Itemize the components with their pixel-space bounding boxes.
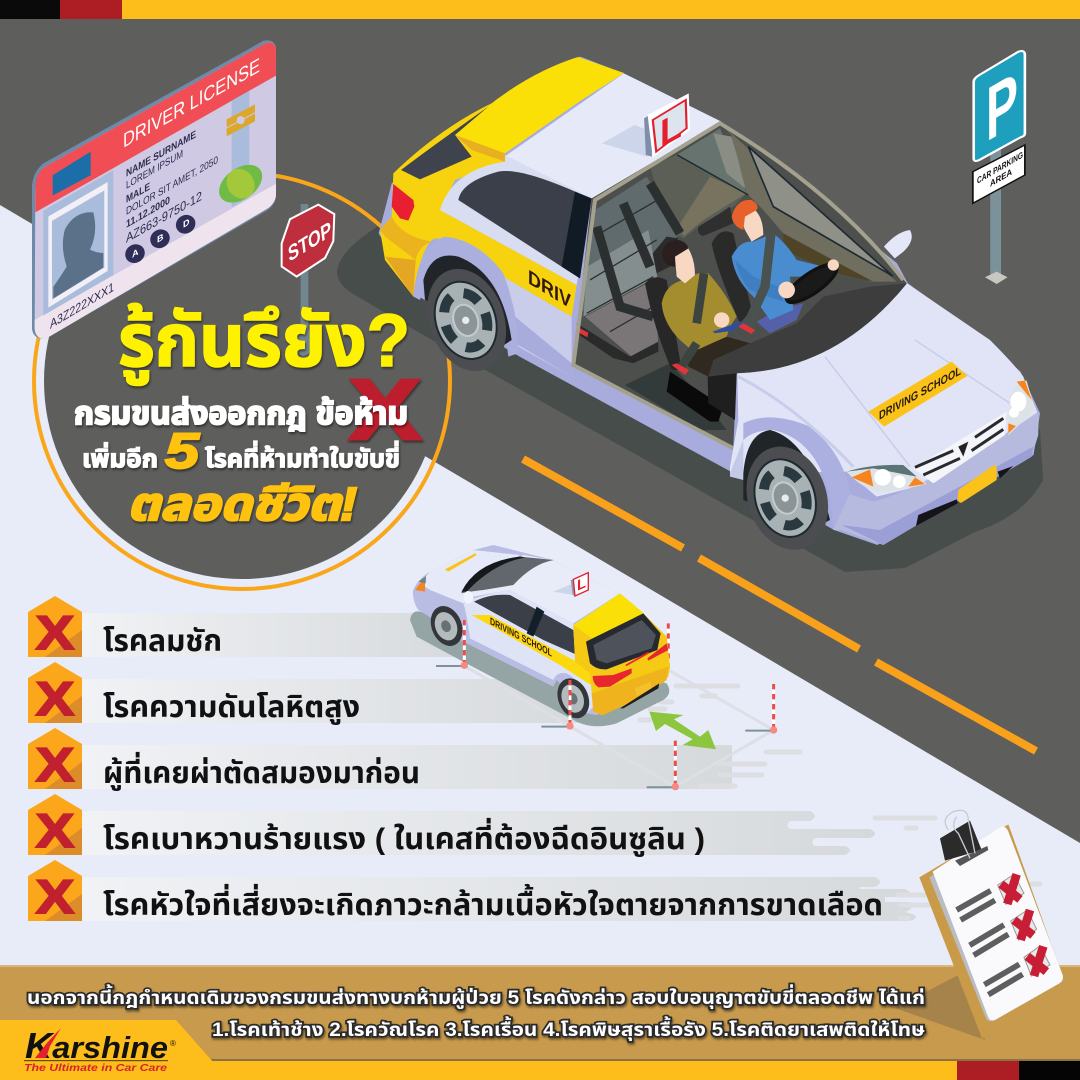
item 4: โรคเบาหวานร้ายแรง ( ในเคสที่ต้องฉีดอินซูลิน ): [103, 817, 705, 857]
driver seat: [712, 231, 752, 323]
small vent: [620, 683, 659, 708]
item 2: โรคความดันโลหิตสูง: [103, 691, 360, 725]
list: prohibited conditions: [28, 596, 883, 923]
small car shadow: [410, 611, 669, 726]
card text: AZ663-9750-12: [126, 188, 202, 246]
small windshield: [462, 557, 554, 593]
subtitle line 2 left: เพิ่มอีก: [82, 442, 158, 473]
small car L letter: L: [577, 574, 586, 595]
stop sign label: STOP: [287, 216, 333, 267]
driver headrest: [698, 207, 733, 236]
licence classes: [122, 211, 199, 267]
parking bay lines: [464, 666, 774, 787]
photo silhouette: [53, 212, 103, 299]
small car body: [413, 545, 670, 715]
driver license card: [32, 40, 276, 339]
number 5: 5: [165, 423, 200, 479]
card text: A: [132, 247, 138, 261]
check boxes: [998, 874, 1050, 976]
parking panel: [974, 51, 1025, 161]
lifetime headline: ตลอดชีวิต!: [127, 478, 357, 530]
item 4: [28, 794, 705, 857]
rear wheel: [414, 258, 520, 382]
board: [919, 824, 1063, 1040]
item 1: [28, 596, 222, 659]
small roof: [460, 555, 620, 623]
passenger seat: [645, 277, 682, 370]
parking letter: P: [986, 56, 1018, 159]
hood: [730, 283, 1038, 497]
item 1: โรคลมชัก: [103, 625, 222, 658]
chip: [227, 104, 255, 136]
main car shadow: [337, 222, 1043, 572]
card text: DOLOR SIT AMET, 2050: [126, 154, 218, 218]
tagline: The Ultimate in Car Care: [24, 1062, 167, 1074]
main driving school car: [379, 57, 1040, 560]
small hood label: [445, 553, 477, 572]
rear side glass: [677, 128, 747, 193]
side label: DRIV: [528, 265, 571, 314]
blue flag: [53, 152, 91, 196]
near poles: [436, 620, 774, 787]
check lines: [957, 891, 1023, 995]
item 5: X: [36, 870, 74, 923]
green double arrow: [649, 712, 716, 749]
circle panel: [44, 183, 440, 579]
paper edge: [929, 828, 1063, 1021]
photo frame: [48, 182, 108, 308]
tail light: [392, 184, 414, 221]
passenger headrest: [653, 237, 678, 273]
footnote: 1.โรคเท้าช้าง 2.โรควัณโรค 3.โรคเรื้อน 4.โรคพิษสุราเรื้อรัง 5.โรคติดยาเสพติดให้โทษ: [212, 1016, 925, 1041]
item 4: X: [36, 804, 74, 857]
far pole: [664, 623, 673, 670]
side window: [458, 171, 590, 278]
rear window: [401, 107, 488, 179]
car interior: [573, 122, 907, 448]
left headlight: [847, 466, 927, 492]
number plate: [958, 465, 997, 503]
registered mark: ®: [170, 1039, 176, 1048]
item 2: [28, 662, 360, 725]
card text: D: [183, 217, 189, 231]
small headlight: [415, 576, 426, 592]
clipboard: [919, 810, 1063, 1040]
rear bumper shading: [380, 217, 432, 260]
stop sign face: [282, 205, 334, 277]
stop sign post: [287, 204, 315, 356]
card text: LOREM IPSUM: [126, 148, 183, 192]
parking sign: [973, 51, 1025, 284]
hood seams: [825, 340, 1010, 467]
small car side label: DRIVING SCHOOL: [490, 616, 552, 660]
area plate text: [977, 150, 1023, 190]
white roof: [504, 73, 721, 199]
door frame: [573, 123, 903, 448]
small side windows: [474, 595, 575, 654]
passenger: [662, 240, 755, 377]
roof sign shadow: [602, 125, 648, 157]
small mirror: [463, 591, 473, 604]
red header band: [35, 43, 276, 212]
headline block: [74, 299, 421, 530]
subtitle line 2 right: โรคที่ห้ามทำใบขับขี่: [205, 441, 400, 473]
L plate: [644, 93, 690, 157]
small L plate: [553, 573, 588, 596]
item 2: X: [36, 672, 74, 725]
card text: DRIVER LICENSE: [123, 54, 260, 153]
small rear roof: [573, 593, 644, 639]
small side panel: [463, 590, 593, 713]
item 5: [28, 860, 883, 923]
under roof shade: [455, 135, 505, 162]
hood label text: DRIVING SCHOOL: [879, 363, 961, 423]
card text: 11.12.2000: [126, 195, 170, 231]
roof pillar: [720, 123, 897, 282]
footer strip: [35, 184, 276, 339]
list bars: [82, 613, 916, 921]
clipboard shadow: [895, 972, 985, 1040]
road lane dashes: [523, 459, 1036, 751]
bumper base: [830, 412, 1038, 545]
card text: [50, 54, 260, 332]
body silhouette: [379, 57, 1040, 545]
cabin back wall: [650, 155, 747, 238]
card text: MALE: [126, 181, 150, 206]
floor: [625, 363, 727, 430]
hood label: [868, 362, 967, 427]
photo panel: [43, 170, 113, 315]
small car parking scene: [410, 545, 777, 790]
Karshine logo: Karshine: [25, 1025, 168, 1066]
top colour strip: [0, 0, 1080, 19]
small rear wheel: [552, 674, 595, 723]
item 1: X: [36, 606, 74, 659]
lower vents: [916, 466, 1013, 526]
car rear section: [380, 57, 624, 382]
lower side panel: [503, 277, 572, 377]
card edge: [32, 40, 276, 339]
small plate: [635, 682, 652, 696]
car front section: [730, 283, 1038, 560]
card text: B: [157, 232, 163, 246]
card body: [35, 43, 276, 339]
item 3: X: [36, 738, 74, 791]
wheel arch: [743, 430, 830, 527]
rear body yellow: [380, 102, 577, 317]
dashboard: [708, 283, 907, 377]
L letter: L: [660, 101, 682, 156]
logo swoosh: [35, 1028, 61, 1058]
area plate text: CAR PARKING: [977, 150, 1023, 187]
small tail lights: [593, 643, 668, 687]
fender crease: [738, 377, 853, 467]
area plate text: AREA: [990, 167, 1012, 190]
footnote: นอกจากนี้กฎกำหนดเดิมของกรมขนส่งทางบกห้ามผู้ป่วย 5 โรคดังกล่าว สอบใบอนุญาตขับขี่ตลอดชีพ ได้แก่: [27, 984, 925, 1009]
right headlight: [1008, 381, 1035, 435]
card text: A3Z222XXX1: [50, 279, 114, 332]
pole bases: [461, 662, 777, 790]
mirror: [884, 230, 912, 258]
rear seats: [580, 177, 682, 313]
footnote: [27, 984, 925, 1041]
bottom band: [0, 965, 1080, 1080]
parking post: [985, 150, 1008, 284]
item 3: ผู้ที่เคยผ่าตัดสมองมาก่อน: [103, 751, 420, 791]
driver: [732, 200, 842, 333]
grey road streaks: [640, 686, 1040, 918]
card text: NAME SURNAME: [126, 129, 196, 180]
small front wheel: [425, 601, 468, 651]
title: รู้กันรึยัง?: [118, 299, 410, 386]
item 3: [28, 728, 420, 791]
grille: [913, 412, 1007, 483]
red crosses: [1001, 874, 1046, 976]
roof yellow: [455, 57, 624, 153]
subtitle line 1: กรมขนส่งออกกฎ ข้อห้าม: [74, 395, 408, 431]
windshield: [748, 147, 893, 276]
front wheel: [734, 436, 841, 560]
area plate: [973, 145, 1025, 203]
security stripe: [232, 91, 249, 207]
hologram: [212, 157, 269, 210]
small yellow rear: [573, 613, 670, 715]
binder clip: [940, 810, 988, 866]
red X mark: X: [349, 363, 421, 458]
item 5: โรคหัวใจที่เสี่ยงจะเกิดภาวะกล้ามเนื้อหัวใจตายจากการขาดเลือด: [103, 883, 883, 922]
wheel arch: [413, 237, 518, 357]
paper: [933, 827, 1063, 1020]
small rear window: [586, 613, 661, 669]
stop sign: [282, 204, 334, 356]
fender: [743, 417, 850, 530]
cabin base: [573, 122, 907, 447]
road background: [0, 0, 1080, 843]
logo rule: [24, 1060, 168, 1061]
small hood: [420, 550, 520, 603]
small yellow stripe: [472, 615, 593, 687]
side panel white: [440, 155, 592, 285]
circle ring: [34, 173, 450, 589]
